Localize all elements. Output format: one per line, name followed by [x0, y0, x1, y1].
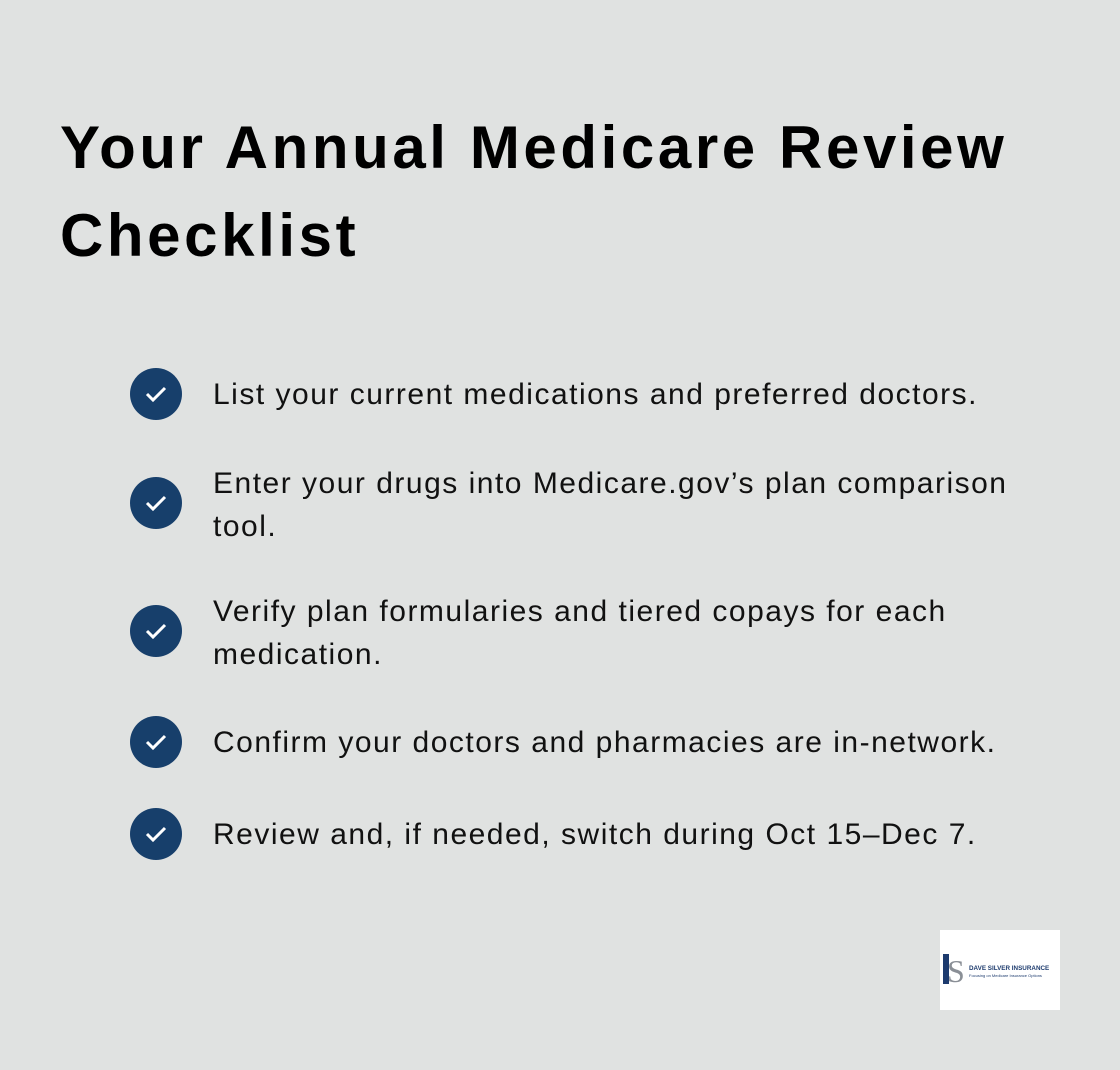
icon: check	[130, 605, 182, 657]
logo: Focusing on Medicare Insurance Options	[969, 973, 1042, 978]
logo: DAVE SILVER INSURANCE	[969, 965, 1049, 972]
text: Confirm your doctors and pharmacies are in-network.	[213, 726, 996, 759]
item 5	[130, 808, 977, 860]
item 1	[130, 368, 978, 420]
title: Checklist	[60, 202, 359, 269]
text: Verify plan formularies and tiered copays for each medication.	[213, 595, 947, 671]
item 3	[130, 595, 947, 671]
item 2	[130, 467, 1007, 543]
icon: check	[130, 477, 182, 529]
title: Your Annual Medicare Review	[60, 114, 1007, 181]
text: Enter your drugs into Medicare.gov’s plan comparison tool.	[213, 467, 1007, 543]
icon: check	[130, 716, 182, 768]
icon: check	[130, 808, 182, 860]
item 4	[130, 716, 996, 768]
text: List your current medications and preferred doctors.	[213, 378, 978, 411]
logo: S	[947, 953, 965, 989]
logo	[940, 930, 1060, 1010]
text: Review and, if needed, switch during Oct 15–Dec 7.	[213, 818, 977, 851]
icon: check	[130, 368, 182, 420]
title	[60, 114, 1007, 269]
